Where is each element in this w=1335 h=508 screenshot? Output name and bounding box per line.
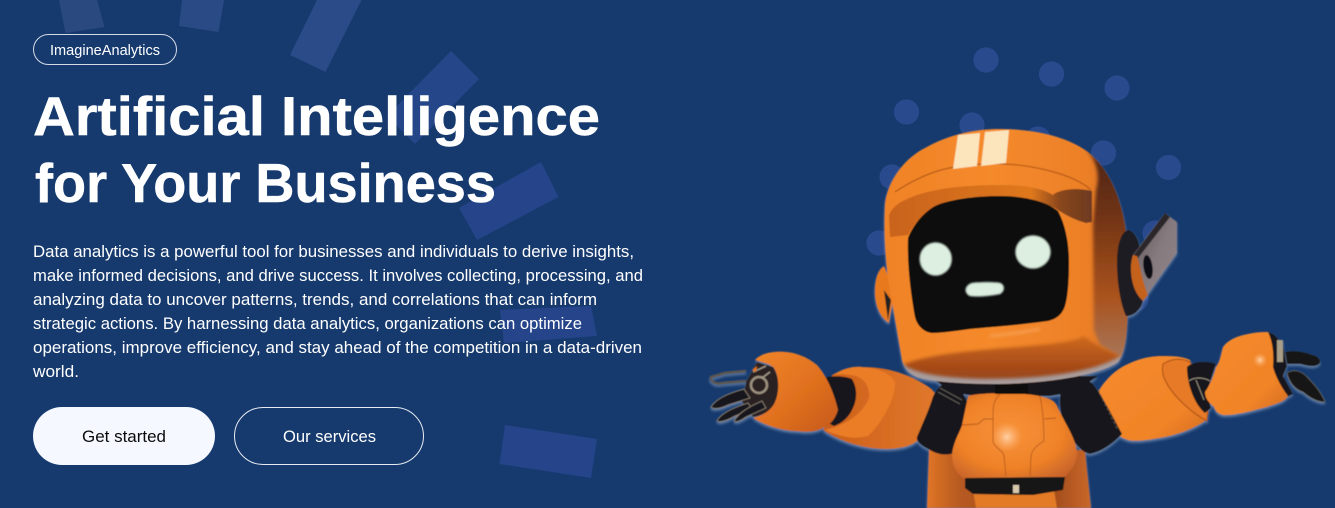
description paragraph: make informed decisions, and drive success. It involves collecting, processing, and [33, 267, 643, 285]
right upper arm [1098, 356, 1208, 441]
forearm highlight [1253, 353, 1267, 367]
decorative tilted rectangles [59, 0, 597, 478]
description paragraph: Data analytics is a powerful tool for businesses and individuals to derive insights, [33, 243, 634, 261]
robot right ear and antenna panel [1117, 213, 1177, 316]
robot illustration [711, 120, 1325, 508]
robot left shoulder joint [917, 383, 968, 454]
button: Our services [234, 408, 424, 464]
right elbow [1187, 362, 1216, 413]
robot left arm [711, 352, 936, 449]
description paragraph: strategic actions. By harnessing data analytics, organizations can optimize [33, 315, 582, 333]
robot right shoulder joint [1060, 380, 1122, 454]
helmet dark side [1086, 152, 1128, 356]
right hand [1262, 332, 1325, 402]
robot jaw [903, 336, 1124, 390]
decorative dots behind robot [866, 47, 1181, 312]
helmet stripes [953, 130, 1009, 169]
left hand [711, 362, 778, 422]
robot right arm [1098, 332, 1325, 441]
robot lower body [927, 450, 1091, 508]
description paragraph [32, 243, 643, 381]
button: Get started: Get started [82, 428, 166, 446]
jaw lip [904, 354, 1122, 385]
helmet crease line [895, 164, 1091, 192]
robot eyes and mouth [920, 236, 1050, 296]
jaw highlight [990, 329, 1040, 336]
description paragraph: operations, improve efficiency, and stay ahead of the competition in a data-driven [33, 339, 642, 357]
title [33, 85, 600, 214]
right forearm [1205, 332, 1288, 415]
title: Artificial Intelligence [33, 85, 600, 147]
title: for Your Business [35, 152, 496, 214]
robot torso [952, 393, 1077, 479]
description paragraph: analyzing data to uncover patterns, trends, and correlations that can inform [33, 291, 597, 309]
button: Get started [33, 407, 215, 465]
left forearm cuff [753, 352, 838, 432]
left upper arm [823, 367, 936, 449]
robot helmet [882, 128, 1129, 385]
description paragraph: world. [32, 363, 79, 381]
robot screen [908, 196, 1069, 333]
robot collar [930, 376, 1098, 396]
badge: ImagineAnalytics: ImagineAnalytics [50, 43, 160, 59]
robot neck [985, 374, 1038, 394]
button: Our services: Our services [283, 428, 376, 446]
robot left ear [875, 266, 893, 323]
badge: ImagineAnalytics [34, 34, 176, 64]
left wrist [822, 376, 856, 426]
helmet recess under visor [889, 185, 1092, 237]
robot belt [965, 477, 1065, 495]
